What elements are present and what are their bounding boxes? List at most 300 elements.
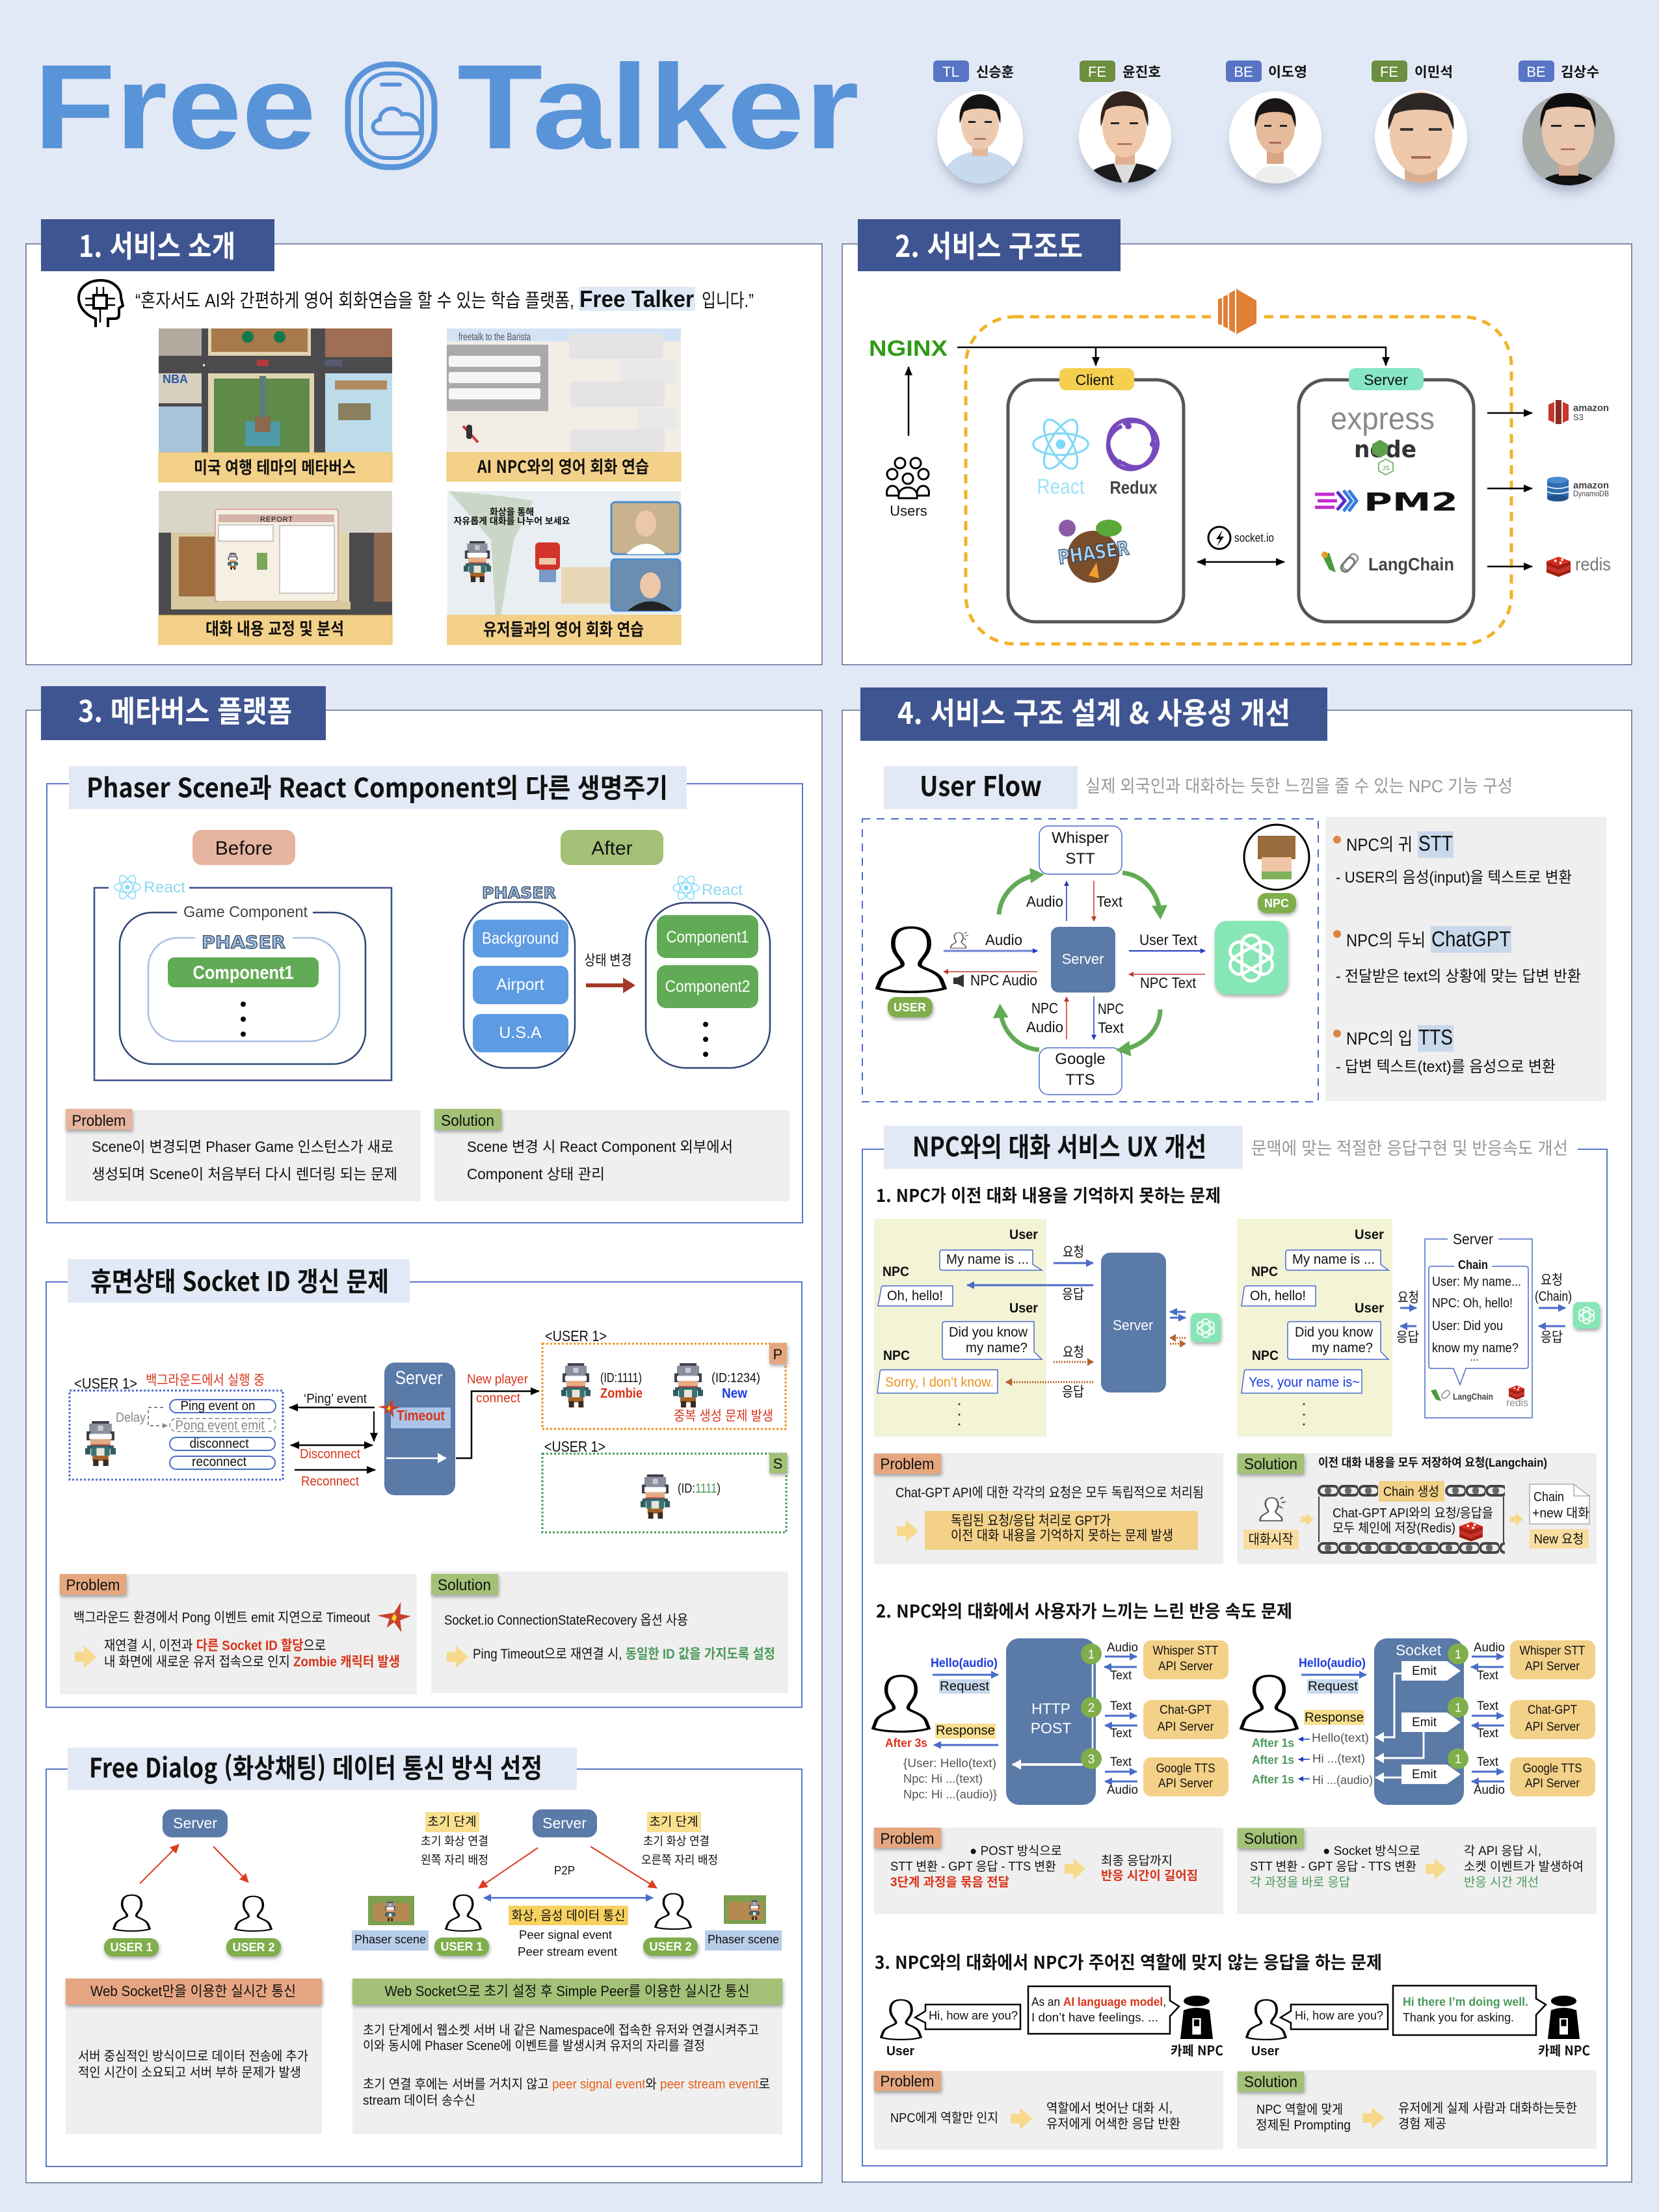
diagram: HTTP POST flow: 2: [1088, 1701, 1095, 1715]
heading: NPC UX: NPC와의 대화 서비스 UX 개선: [912, 1125, 1206, 1164]
solution box 1: [1237, 1453, 1597, 1564]
diagram: web socket only: Server: [173, 1815, 217, 1832]
problem box 2: Problem: [881, 1830, 934, 1848]
card: web socket only: [66, 1979, 322, 2134]
heading: problem 1: 1. NPC가 이전 대화 내용을 기억하지 못하는 문제: [876, 1182, 1221, 1207]
diagram: socket flow: Socket: [1396, 1642, 1442, 1659]
box: server with chain: NPC: Oh, hello!: [1432, 1296, 1513, 1311]
diagram: chat with memory: [1237, 1219, 1600, 1437]
diagram: chat without memory: my name?: [966, 1340, 1028, 1355]
badge: Before: Before: [215, 838, 272, 859]
P server block: <USER 1>: [545, 1327, 607, 1344]
diagram: socket flow: Emit: [1412, 1716, 1437, 1729]
solution box 2: STT 변환 - GPT 응답 - TTS 변환: [1250, 1859, 1416, 1874]
diagram: chat with memory: NPC: [1251, 1264, 1278, 1279]
P server block: (ID:1111): [600, 1371, 642, 1385]
icon: AI brain head: [79, 280, 123, 327]
diagram: chat with memory: Did you know: [1295, 1325, 1374, 1340]
diagram: web socket only: USER 1: [110, 1941, 153, 1954]
diagram: chat with memory: 요청: [1398, 1290, 1419, 1305]
image: video chat: [447, 491, 681, 615]
caption: 미국 여행 테마의 메타버스: 미국 여행 테마의 메타버스: [194, 455, 356, 479]
card: simple peer: [352, 1979, 782, 2134]
diagram: before: React: [144, 879, 185, 896]
member: 윤진호: 윤진호: [1122, 62, 1161, 81]
diagram: HTTP POST flow: Npc: Hi ...(text): [903, 1772, 983, 1785]
problem box 1: Problem: [881, 1456, 934, 1473]
solution box 3: Solution: [1244, 2073, 1297, 2091]
diagram: HTTP POST flow: Hello(audio): [931, 1657, 998, 1670]
diagram: chat with memory: My name is ...: [1292, 1252, 1375, 1267]
box: server with chain: User: Did you: [1432, 1319, 1503, 1333]
solution box 1: Chat-GPT API와의 요청/응답을: [1333, 1506, 1493, 1521]
box: server with chain: know my name?: [1432, 1341, 1519, 1355]
diagram: chat with memory: Oh, hello!: [1250, 1288, 1306, 1303]
diagram: simple peer: Phaser scene: [354, 1933, 426, 1946]
caption: 미국 여행 테마의 메타버스: [159, 453, 392, 482]
solution box 3: 유저에게 실제 사람과 대화하는듯한: [1398, 2101, 1577, 2116]
diagram: chat with memory: my name?: [1312, 1340, 1373, 1355]
S server block: S: [773, 1456, 782, 1472]
client state block: <USER 1>: [74, 1375, 137, 1392]
diagram: after phaser: Background: [482, 929, 559, 948]
caption: AI NPC와의 영어 회화 연습: [447, 453, 681, 481]
diagram: socket flow: Hello(audio): [1299, 1657, 1366, 1670]
diagram: user flow: Text: [1096, 893, 1123, 910]
dialog: off-role answer: 카페 NPC: [1171, 2040, 1223, 2059]
diagram: after react: Component2: [665, 978, 750, 996]
sub-heading: Free Dialog (화상채팅) 데이터 통신 방식 선정: [89, 1746, 542, 1785]
diagram: simple peer: 화상, 음성 데이터 통신: [511, 1908, 626, 1923]
problem box: [60, 1574, 417, 1694]
problem box 3: [874, 2071, 1223, 2150]
box: server with chain: Chain: [1458, 1259, 1488, 1272]
problem box: Scene이 변경되면 Phaser Game 인스턴스가 새로: [92, 1138, 393, 1155]
problem box 1: 독립된 요청/응답 처리로 GPT가: [951, 1513, 1111, 1528]
new player connector: connect: [476, 1391, 520, 1406]
diagram: socket flow: Request: [1308, 1679, 1358, 1694]
box: server: Server: [1364, 371, 1408, 388]
solution box 2: Solution: [1244, 1830, 1297, 1848]
problem box: 내 화면에 새로운 유저 접속으로 인지 Zombie 캐릭터 발생: [104, 1655, 400, 1670]
member: 신승훈: TL: [942, 64, 959, 80]
logo: amazon DynamoDB: amazon: [1573, 480, 1609, 491]
diagram: socket flow: Emit: [1412, 1664, 1437, 1678]
problem box 2: 반응 시간이 길어짐: [1101, 1869, 1198, 1883]
diagram: socket flow: [1241, 1638, 1595, 1805]
diagram: HTTP POST flow: Response: [936, 1724, 995, 1738]
diagram: simple peer: Peer signal event: [519, 1928, 612, 1941]
client state block: 백그라운드에서 실행 중: [146, 1373, 265, 1388]
diagram: user flow: NPC: [1264, 897, 1289, 910]
solution box 3: 정제된 Prompting: [1256, 2118, 1351, 2133]
solution box 1: 모두 체인에 저장(Redis): [1333, 1521, 1455, 1536]
diagram: socket flow: 1: [1455, 1753, 1461, 1766]
diagram: chat without memory: User: [1009, 1301, 1038, 1316]
box: client: [1008, 368, 1611, 622]
card: simple peer: Web Socket으로 초기 설정 후 Simple Peer를 이용한 실시간 통신: [385, 1983, 749, 1999]
panel: NPC functions list: - USER의 음성(input)을 텍스트로 변환: [1336, 869, 1572, 886]
solution box 1: 이전 대화 내용을 모두 저장하여 요청(Langchain): [1318, 1456, 1547, 1469]
heading: problem 2: 2. NPC와의 대화에서 사용자가 느끼는 느린 반응 속도 문제: [876, 1597, 1292, 1623]
image: video chat: 자유롭게 대화를 나누어 보세요: [453, 516, 570, 526]
problem box 3: 유저에게 어색한 응답 반환: [1046, 2116, 1180, 2131]
diagram: chat with memory: Yes, your name is~: [1249, 1375, 1360, 1390]
member: 윤진호: FE: [1088, 64, 1106, 80]
problem box 1: Chat-GPT API에 대한 각각의 요청은 모두 독립적으로 처리됨: [896, 1486, 1204, 1500]
diagram: user flow: [862, 819, 1318, 1102]
problem box: Problem: [72, 1112, 126, 1130]
client state block: reconnect: [192, 1455, 246, 1469]
problem box 3: Problem: [881, 2073, 934, 2090]
diagram: user flow: Audio: [1026, 893, 1063, 910]
dialog: in-role answer: Thank you for asking.: [1403, 2011, 1514, 2024]
P server block: (ID:1234): [711, 1371, 760, 1385]
logo: redis: redis: [1575, 554, 1611, 574]
diagram: chat without memory: NPC: [883, 1348, 910, 1363]
solution box 1: 대화시작: [1249, 1532, 1293, 1547]
diagram: user flow: NPC Text: [1140, 974, 1197, 991]
new player connector: New player: [467, 1372, 528, 1387]
diagram: HTTP POST flow: 3: [1088, 1753, 1095, 1766]
problem box: 생성되며 Scene이 처음부터 다시 렌더링 되는 문제: [92, 1166, 397, 1182]
dialog: off-role answer: As an AI language model,: [1031, 1995, 1166, 2008]
diagram: chat without memory: 응답: [1062, 1287, 1084, 1302]
diagram: simple peer: 왼쪽 자리 배정: [421, 1854, 488, 1867]
solution box 2: ● Socket 방식으로: [1323, 1844, 1420, 1858]
word: Talker: Talker: [457, 40, 859, 174]
diagram: HTTP POST flow: Text: [1110, 1669, 1132, 1683]
diagram: chat with memory: User: [1355, 1227, 1384, 1242]
diagram: after phaser: Airport: [496, 976, 544, 994]
logo: React: React: [1037, 475, 1085, 498]
diagram: socket flow: Google TTS: [1523, 1762, 1582, 1776]
logo: amazon S3: [1548, 400, 1609, 424]
tagline: Free Talker: [579, 286, 694, 312]
arrows and labels between client and server: [289, 1392, 375, 1489]
panel: NPC functions list: ChatGPT: [1431, 927, 1511, 951]
diagram: HTTP POST flow: Text: [1110, 1727, 1132, 1740]
client state block: [70, 1373, 283, 1480]
subtitle: user flow: 실제 외국인과 대화하는 듯한 느낌을 줄 수 있는 NPC 기능 구성: [1085, 777, 1513, 796]
solution box: Solution: [441, 1112, 494, 1130]
diagram: HTTP POST flow: Whisper STT: [1152, 1644, 1219, 1658]
sub-heading: Phaser Scene과 React Component의 다른 생명주기: [86, 766, 668, 805]
box: server: [1299, 368, 1474, 622]
heading: problem 3: 3. NPC와의 대화에서 NPC가 주어진 역할에 맞지 않는 응답을 하는 문제: [875, 1949, 1382, 1974]
P server block: P: [773, 1346, 782, 1363]
solution box 3: 경험 제공: [1398, 2116, 1446, 2131]
dialog: off-role answer: [881, 1986, 1223, 2059]
member: 김상수: 김상수: [1561, 62, 1599, 81]
logo: redis: [1546, 554, 1611, 577]
dialog: in-role answer: [1247, 1986, 1590, 2059]
panel: NPC functions list: - 답변 텍스트(text)를 음성으로 변환: [1336, 1058, 1556, 1076]
logo: React: [1033, 415, 1088, 498]
diagram: socket flow: Whisper STT: [1519, 1644, 1586, 1658]
arrows and labels between client and server: ‘Ping’ event: [304, 1392, 367, 1406]
solution box 1: New 요청: [1533, 1532, 1584, 1547]
solution box: Solution: [438, 1577, 491, 1594]
server block: Server: [395, 1368, 443, 1389]
diagram: HTTP POST flow: Google TTS: [1156, 1762, 1215, 1776]
diagram: chat without memory: Oh, hello!: [887, 1288, 943, 1303]
S server block: <USER 1>: [544, 1438, 605, 1455]
panel: 1. service intro: [26, 219, 822, 665]
diagram: user flow: Whisper: [1052, 829, 1109, 847]
logo: amazon S3: amazon: [1573, 403, 1609, 414]
heading: 2. 서비스 구조도: [858, 219, 1121, 271]
diagram: after phaser: [464, 884, 575, 1068]
title: Free Talker logo: [34, 40, 859, 174]
logo: Redux: Redux: [1109, 477, 1158, 498]
diagram: simple peer: 초기 단계: [427, 1815, 477, 1829]
diagram: HTTP POST flow: 1: [1088, 1648, 1095, 1662]
problem box 2: ● POST 방식으로: [970, 1844, 1062, 1858]
solution box 3: NPC 역할에 맞게: [1256, 2102, 1343, 2117]
diagram: socket flow: Hello(text): [1312, 1731, 1369, 1744]
diagram: socket flow: Text: [1477, 1755, 1499, 1769]
caption: AI NPC와의 영어 회화 연습: AI NPC와의 영어 회화 연습: [477, 454, 649, 478]
box: server with chain: Server: [1453, 1231, 1493, 1247]
image: metaverse map: [159, 328, 392, 453]
diagram: simple peer: Peer stream event: [518, 1945, 617, 1958]
member: 신승훈: [930, 60, 1034, 189]
box: server with chain: redis: [1506, 1398, 1528, 1409]
heading: 2. 서비스 구조도: 2. 서비스 구조도: [895, 223, 1083, 266]
diagram: HTTP POST flow: [873, 1638, 1228, 1805]
solution box 3: [1237, 2070, 1597, 2149]
diagram: user flow: Server: [1062, 951, 1104, 967]
card: web socket only: Web Socket만을 이용한 실시간 통신: [90, 1983, 296, 1999]
P server block: New: [722, 1386, 748, 1401]
diagram: user flow: Text: [1098, 1019, 1124, 1036]
diagram: chat with memory: (Chain): [1535, 1289, 1572, 1304]
diagram: HTTP POST flow: Audio: [1107, 1783, 1138, 1797]
diagram: socket flow: After 1s: [1252, 1737, 1294, 1750]
diagram: HTTP POST flow: Npc: Hi ...(audio)}: [903, 1788, 997, 1801]
S server block: [542, 1438, 787, 1532]
dialog: in-role answer: Hi there I’m doing well.: [1403, 1995, 1528, 2008]
diagram: chat without memory: 요청: [1063, 1345, 1084, 1360]
diagram: simple peer: Phaser scene: [708, 1933, 779, 1946]
logo: NGINX: NGINX: [869, 336, 948, 361]
solution box 2: [1237, 1827, 1597, 1914]
dialog: in-role answer: User: [1251, 2044, 1279, 2059]
solution box: Ping Timeout으로 재연결 시, 동일한 ID 값을 가지도록 설정: [473, 1647, 775, 1662]
solution box: [434, 1109, 790, 1201]
member: 신승훈: 신승훈: [976, 62, 1014, 81]
diagram: user flow: Audio: [1026, 1019, 1063, 1035]
dialog: in-role answer: 카페 NPC: [1538, 2040, 1590, 2059]
diagram: chat with memory: 요청: [1541, 1273, 1563, 1288]
diagram: chat without memory: 요청: [1063, 1245, 1084, 1260]
panel: NPC functions list: NPC의 두뇌: [1346, 931, 1426, 950]
arrow: client server link: [1197, 561, 1284, 563]
section: free dialog: [46, 1746, 802, 2166]
diagram: socket flow: Chat-GPT: [1528, 1703, 1577, 1717]
card: web socket only: 서버 중심적인 방식이므로 데이터 전송에 추가: [78, 2049, 308, 2064]
problem box: 재연결 시, 이전과 다른 Socket ID 할당으로: [104, 1638, 326, 1653]
caption: 유저들과의 영어 회화 연습: 유저들과의 영어 회화 연습: [483, 617, 644, 641]
panel: NPC functions list: STT: [1418, 831, 1453, 855]
arrows and labels between client and server: Disconnect: [300, 1447, 360, 1461]
diagram: simple peer: Server: [542, 1815, 587, 1832]
client state block: Delay: [116, 1411, 146, 1425]
arrows: server to storage: [1487, 413, 1532, 566]
solution box: [431, 1571, 788, 1693]
team members: [930, 60, 1619, 192]
label: Users: Users: [890, 503, 927, 519]
diagram: socket flow: API Server: [1525, 1660, 1580, 1673]
member: 이민석: [1369, 60, 1473, 189]
badge: After: After: [591, 838, 633, 859]
P server block: Zombie: [600, 1386, 643, 1401]
diagram: HTTP POST flow: {User: Hello(text): [903, 1757, 996, 1770]
client state block: disconnect: [190, 1437, 249, 1451]
box: server with chain: User: My name...: [1432, 1275, 1521, 1289]
solution box 1: Chain: [1533, 1490, 1564, 1504]
diagram: HTTP POST flow: Audio: [1107, 1641, 1138, 1655]
diagram: socket flow: Hi ...(audio): [1312, 1774, 1373, 1787]
solution box: Scene 변경 시 React Component 외부에서: [467, 1138, 733, 1155]
diagram: before: PHASER: [202, 933, 285, 953]
diagram: HTTP POST flow: API Server: [1158, 1660, 1214, 1673]
diagram: chat without memory: 응답: [1062, 1385, 1084, 1400]
AWS dashed boundary: [966, 317, 1511, 644]
image: metaverse map: NBA: [163, 373, 188, 386]
icon: airplane window with cloud: [348, 64, 434, 167]
diagram: socket flow: After 1s: [1252, 1753, 1294, 1766]
card: simple peer: stream 데이터 송수신: [363, 2093, 475, 2108]
solution box: Socket.io ConnectionStateRecovery 옵션 사용: [444, 1613, 688, 1628]
diagram: user flow: NPC: [1031, 1000, 1058, 1017]
problem box: Problem: [66, 1577, 120, 1594]
dialog: off-role answer: Hi, how are you?: [929, 2009, 1018, 2022]
logo: amazon S3: S3: [1573, 412, 1584, 422]
diagram: HTTP POST flow: POST: [1031, 1720, 1071, 1737]
diagram: HTTP POST flow: HTTP: [1031, 1700, 1070, 1717]
solution box 2: 소켓 이벤트가 발생하여: [1464, 1859, 1584, 1874]
panel: 3. metaverse platform: [26, 686, 822, 2183]
diagram: user flow: NPC Audio: [970, 972, 1037, 989]
sub-heading: 휴면상태 Socket ID 갱신 문제: [90, 1260, 389, 1299]
client state block: Ping event on: [181, 1399, 255, 1413]
diagram: socket flow: Text: [1477, 1727, 1499, 1740]
server block: Timeout: [397, 1407, 445, 1424]
diagram: HTTP POST flow: API Server: [1158, 1777, 1214, 1791]
box: client: Client: [1076, 371, 1114, 388]
tagline: 입니다.”: [702, 290, 754, 312]
problem box 2: 최종 응답까지: [1101, 1854, 1173, 1868]
diagram: user flow: STT: [1065, 850, 1095, 868]
diagram: HTTP POST flow: Text: [1110, 1699, 1132, 1713]
diagram: HTTP POST flow: Text: [1110, 1755, 1132, 1769]
diagram: socket flow: Text: [1477, 1699, 1499, 1713]
S server block: (ID:1111): [678, 1482, 721, 1496]
diagram: chat with memory: 응답: [1396, 1330, 1419, 1345]
member: 이민석: FE: [1380, 64, 1398, 80]
solution box 2: 각 과정을 바로 응답: [1250, 1875, 1350, 1889]
heading: User Flow: User Flow: [920, 765, 1042, 805]
diagram: before: [94, 873, 392, 1080]
diagram: socket flow: Hi ...(text): [1312, 1752, 1365, 1765]
icon: users: [887, 458, 929, 498]
logo: Phaser: PHASER: [1057, 537, 1131, 570]
caption: 유저들과의 영어 회화 연습: [447, 615, 681, 645]
icon: socket.io: [1208, 527, 1274, 549]
diagram: HTTP POST flow: After 3s: [885, 1737, 927, 1750]
member: 이도영: 이도영: [1268, 62, 1307, 81]
panel: NPC functions list: TTS: [1418, 1025, 1453, 1049]
label and arrow: state change: 상태 변경: [584, 952, 632, 968]
tagline: “혼자서도 AI와 간편하게 영어 회화연습을 할 수 있는 학습 플랫폼,: [135, 290, 574, 312]
diagram: chat without memory: My name is ...: [946, 1252, 1029, 1267]
section: Phaser Scene lifecycle: [47, 766, 803, 1223]
problem box 2: 3단계 과정을 묶음 전달: [890, 1875, 1009, 1889]
member: 윤진호: [1073, 60, 1177, 189]
problem box 2: [874, 1828, 1223, 1914]
problem box 3: 역할에서 벗어난 대화 시,: [1046, 2101, 1173, 2116]
logo: PM2: [1315, 488, 1458, 516]
box: server with chain: [1425, 1231, 1532, 1418]
diagram: user flow: Google: [1055, 1050, 1106, 1068]
subtitle: NPC UX: 문맥에 맞는 적절한 응답구현 및 반응속도 개선: [1251, 1139, 1568, 1158]
client state block: Pong event emit: [176, 1419, 265, 1433]
diagram: chat without memory: NPC: [883, 1264, 909, 1279]
badge: After: [561, 830, 663, 865]
diagram: HTTP POST flow: Chat-GPT: [1160, 1703, 1212, 1717]
diagram: socket flow: API Server: [1525, 1777, 1580, 1791]
dialog: off-role answer: User: [886, 2044, 914, 2059]
diagram: simple peer: P2P: [554, 1864, 575, 1877]
diagram: simple peer: 초기 단계: [649, 1815, 698, 1829]
heading: 4: 4. 서비스 구조 설계 & 사용성 개선: [897, 690, 1290, 733]
diagram: socket flow: 1: [1455, 1648, 1461, 1662]
diagram: socket flow: Emit: [1412, 1768, 1437, 1781]
panel: NPC functions list: - 전달받은 text의 상황에 맞는 답변 반환: [1336, 968, 1581, 985]
heading: 3. 메타버스 플랫폼: 3. 메타버스 플랫폼: [78, 688, 292, 731]
image: report: REPORT: [260, 516, 293, 524]
diagram: socket flow: 1: [1455, 1701, 1461, 1715]
diagram: chat with memory: NPC: [1252, 1348, 1279, 1363]
diagram: socket flow: Audio: [1474, 1641, 1505, 1655]
diagram: simple peer: USER 1: [440, 1940, 483, 1953]
box: server with chain: LangChain: [1453, 1391, 1493, 1402]
logo: LangChain: LangChain: [1368, 554, 1454, 574]
arrow: NGINX to client and server: [957, 347, 1387, 366]
card: simple peer: 이와 동시에 Phaser Scene에 이벤트를 발생시켜 유저의 자리를 결정: [363, 2038, 705, 2053]
logo: PM2: PM2: [1364, 488, 1458, 516]
problem box: [66, 1109, 421, 1201]
heading: 1. 서비스 소개: [41, 219, 274, 271]
diagram: simple peer: [352, 1809, 782, 1958]
member: 김상수: BE: [1526, 64, 1546, 80]
solution box 1: +new 대화: [1532, 1506, 1589, 1521]
panel: NPC functions list: NPC의 입: [1346, 1029, 1413, 1048]
arrow: users to NGINX: [908, 367, 909, 436]
solution box 1: Chain 생성: [1383, 1484, 1439, 1499]
member: 김상수: [1515, 60, 1619, 192]
diagram: chat without memory: Server: [1113, 1317, 1153, 1333]
diagram: web socket only: [104, 1809, 281, 1956]
caption: 대화 내용 교정 및 분석: 대화 내용 교정 및 분석: [206, 616, 344, 640]
P server block: [542, 1327, 787, 1429]
problem box 1: 이전 대화 내용을 기억하지 못하는 문제 발생: [951, 1528, 1173, 1543]
server block: [378, 1363, 455, 1495]
diagram: socket flow: Response: [1305, 1711, 1364, 1725]
diagram: chat with memory: User: [1355, 1301, 1384, 1316]
